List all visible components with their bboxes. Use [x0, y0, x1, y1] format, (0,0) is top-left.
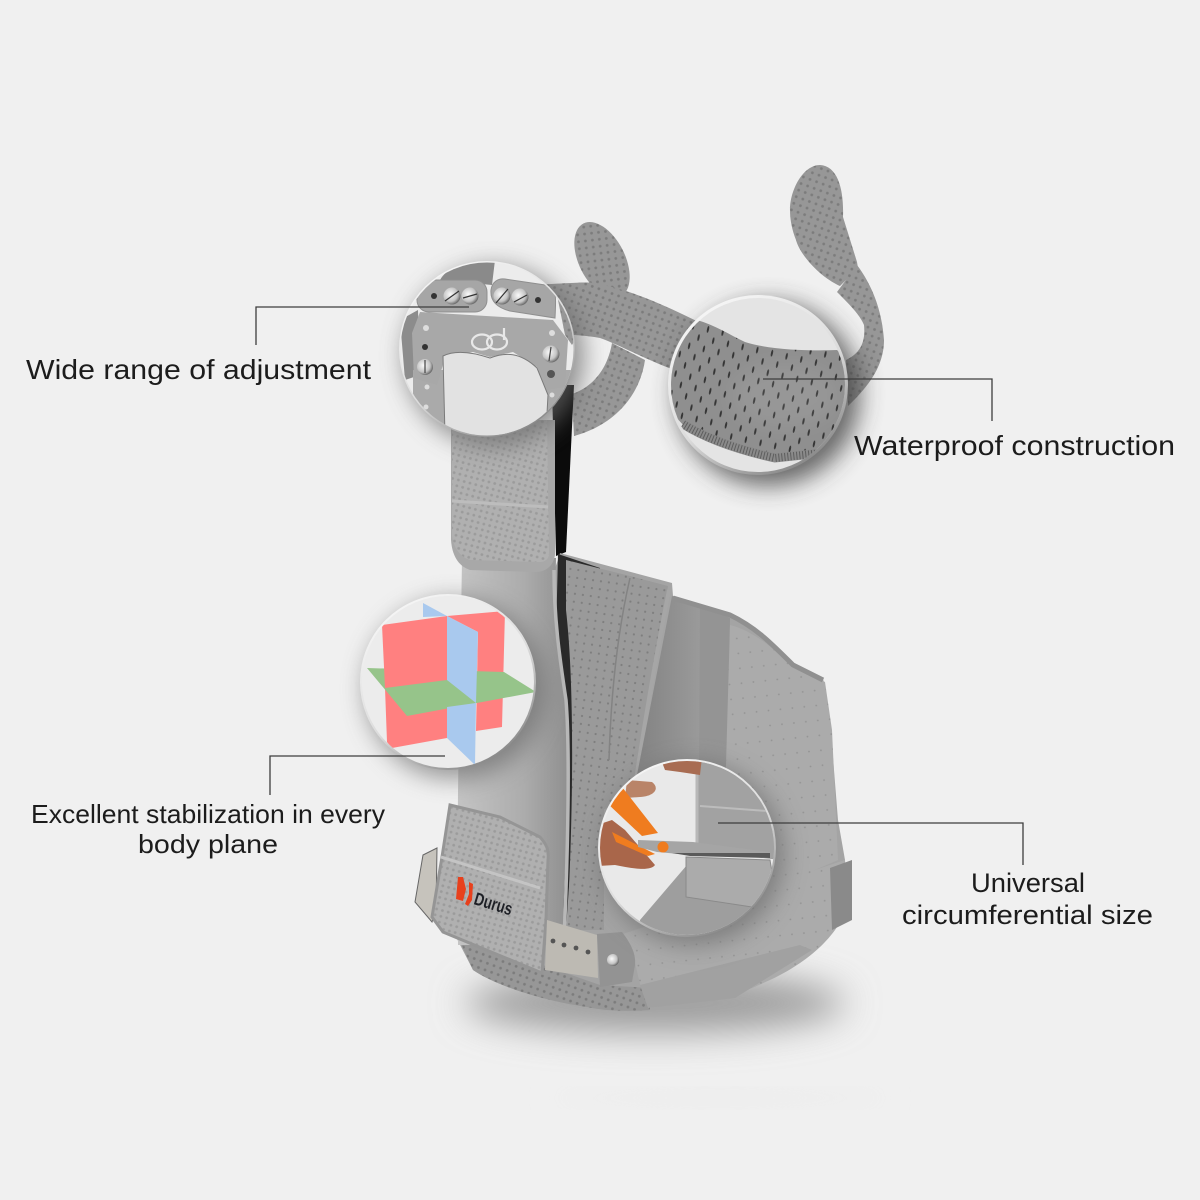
upper strap fold	[452, 501, 548, 507]
lens: waterproof mesh	[660, 290, 860, 486]
lens: body planes	[360, 594, 545, 779]
left buckle strap	[415, 848, 437, 922]
belt mesh column	[566, 560, 630, 930]
hem	[683, 424, 822, 458]
label: universal circumferential size	[902, 868, 1153, 930]
logo: Durus: Durus	[472, 889, 515, 919]
mesh fabric	[671, 320, 845, 456]
hip flap fold	[441, 857, 540, 888]
leader line: stabilization	[270, 756, 445, 795]
plane diagram	[367, 603, 536, 765]
center window	[442, 352, 548, 436]
label: wide range of adjustment: Wide range of adjustment	[26, 354, 371, 385]
label: waterproof construction: Waterproof construction	[854, 430, 1175, 461]
label: excellent stabilization	[31, 799, 385, 859]
upright edge highlight	[554, 570, 568, 940]
hole strap	[545, 920, 598, 978]
belt bottom mesh	[457, 935, 650, 1011]
ground shadow	[465, 973, 890, 1104]
leader line: waterproof	[763, 379, 992, 421]
belt top band	[673, 598, 823, 680]
lower arc strap	[572, 343, 645, 436]
plate	[412, 312, 568, 370]
belt fabric panel	[636, 596, 700, 780]
plate logo	[472, 328, 507, 350]
right shoulder ear pad	[790, 165, 858, 286]
lens: scissors cutting	[595, 755, 790, 945]
belt lower straps	[640, 945, 812, 1008]
belt angled strap	[602, 576, 668, 810]
hip flap	[432, 805, 548, 973]
label: excellent stabilization: Excellent stabilization in every	[31, 799, 385, 829]
dark spine gap	[552, 385, 574, 556]
strap edge highlight	[636, 590, 669, 780]
blades	[638, 840, 721, 854]
shoulder strap	[530, 282, 705, 372]
upright panel	[457, 558, 568, 945]
belt side panel	[699, 604, 730, 780]
fabric	[640, 762, 774, 935]
rivet patch	[597, 932, 635, 987]
upper strap mesh	[452, 420, 549, 562]
lumbar belt	[455, 553, 846, 1011]
lens: adjustment plate	[390, 255, 590, 450]
belt perforated panel	[700, 625, 838, 920]
lower pad	[413, 370, 571, 436]
hands	[662, 761, 702, 775]
leader line: circumferential	[718, 823, 1023, 865]
right side buckle	[830, 860, 852, 930]
scissor handles	[607, 787, 658, 836]
label: excellent stabilization: body plane	[138, 829, 278, 859]
upper strap	[451, 420, 555, 572]
label: universal circumferential size: circumferential size	[902, 900, 1153, 930]
product: back brace	[415, 165, 884, 1011]
plate top tabs	[417, 280, 487, 312]
leader line: adjustment	[256, 307, 469, 345]
fabric highlight	[738, 366, 832, 424]
right shoulder strap	[837, 265, 884, 406]
strap seam	[609, 578, 630, 760]
logo: Durus	[456, 877, 515, 919]
left shoulder ear pad	[563, 213, 641, 307]
belt lower band	[620, 860, 848, 1008]
screws	[444, 288, 460, 304]
label: universal circumferential size: Universal	[971, 868, 1085, 898]
